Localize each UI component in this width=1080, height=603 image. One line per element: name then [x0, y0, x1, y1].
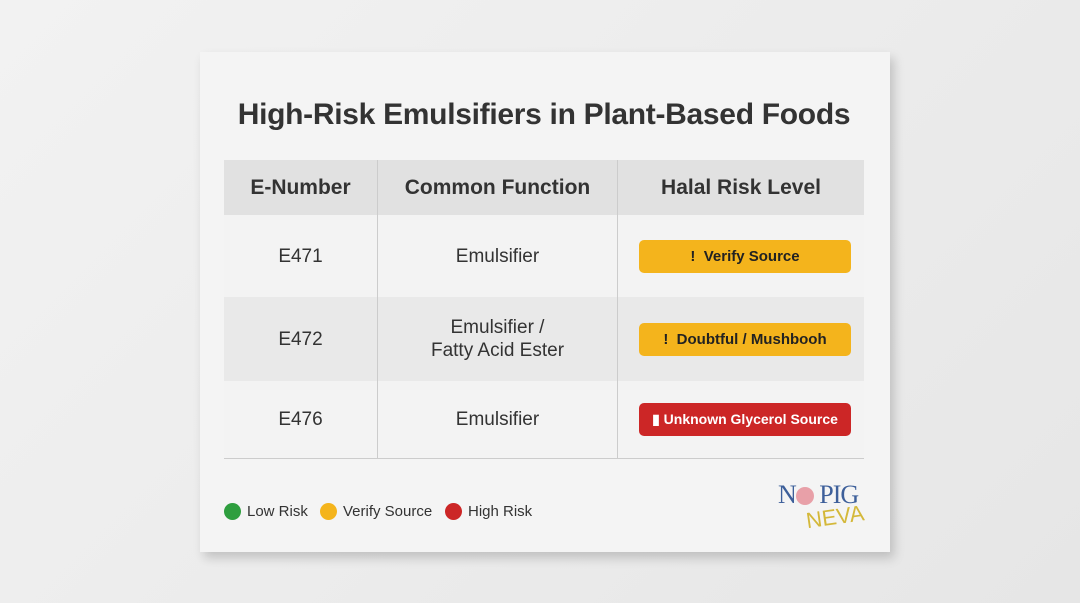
header row: Common Function [405, 176, 590, 198]
card [200, 52, 890, 552]
legend: low risk: Low Risk [247, 503, 308, 520]
logo [778, 480, 866, 533]
header row: Halal Risk Level [661, 176, 821, 198]
row E476: ▮ Unknown Glycerol Source [652, 411, 838, 427]
row E471 [224, 215, 864, 297]
row E472: Emulsifier / [450, 317, 544, 338]
row E476: E476 [278, 409, 323, 430]
legend: verify source: Verify Source [343, 503, 432, 520]
logo: NEVA [804, 500, 866, 533]
row E472 [224, 297, 864, 381]
row E472: E472 [278, 328, 323, 350]
row E476 [224, 381, 864, 459]
row E472: ! Doubtful / Mushbooh [663, 330, 827, 348]
title: High-Risk Emulsifiers in Plant-Based Foods [238, 98, 850, 131]
header row [224, 160, 864, 215]
table [224, 160, 864, 459]
row E471: E471 [278, 246, 323, 266]
row E476: Emulsifier [456, 409, 539, 430]
logo: N PIG [778, 480, 858, 509]
legend: high risk: High Risk [468, 503, 532, 520]
row E471: Emulsifier [456, 246, 539, 266]
row E472: Fatty Acid Ester [431, 340, 564, 361]
row E471: ! Verify Source [690, 248, 800, 264]
header row: E-Number [250, 176, 351, 198]
